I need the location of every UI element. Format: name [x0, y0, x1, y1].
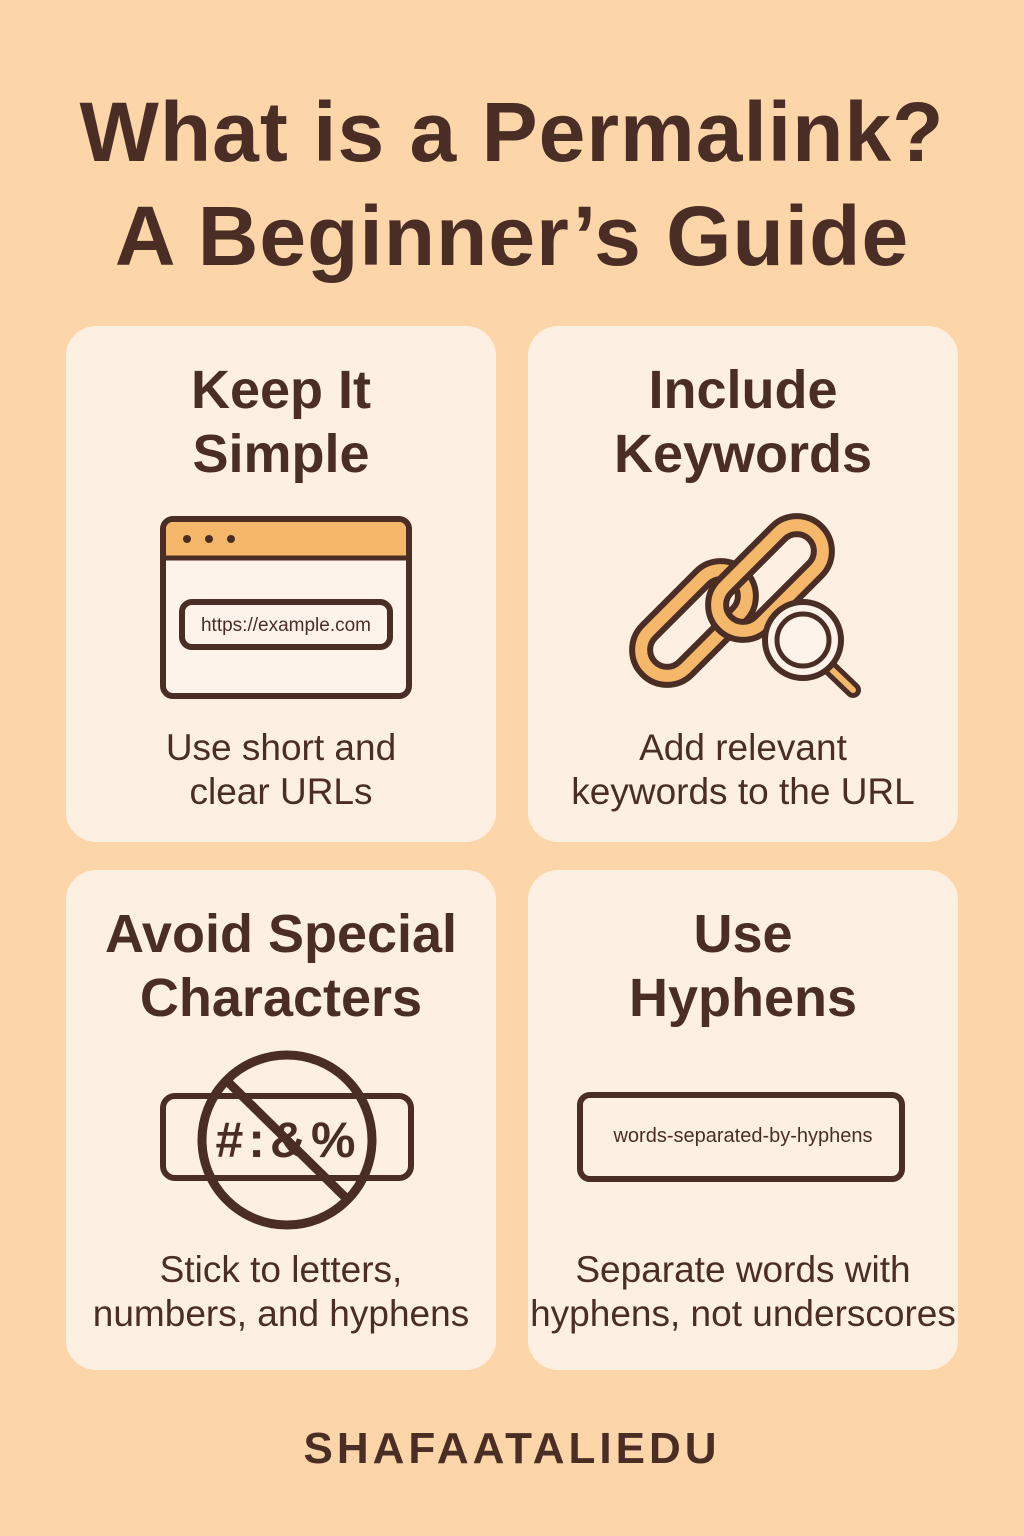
heading: Use — [693, 904, 793, 964]
heading — [191, 360, 371, 484]
description: Use short and — [166, 727, 396, 768]
heading: Keywords — [614, 424, 872, 484]
icon: prohibited characters: #:&% — [215, 1112, 361, 1168]
heading: Avoid Special — [105, 904, 457, 964]
description: Stick to letters, — [160, 1249, 402, 1290]
title — [80, 85, 944, 283]
heading — [105, 904, 457, 1028]
description — [530, 1249, 956, 1334]
icon: hyphenated url box — [577, 1092, 905, 1182]
panel: use hyphens — [528, 870, 958, 1370]
panel: include keywords — [528, 326, 958, 842]
heading: Keep It — [191, 360, 371, 420]
icon: hyphenated url box: words-separated-by-hyphens — [612, 1125, 873, 1147]
title: A Beginner’s Guide — [115, 189, 909, 283]
heading: Simple — [192, 424, 370, 484]
description: Separate words with — [575, 1249, 911, 1290]
description: keywords to the URL — [571, 771, 915, 812]
heading — [614, 360, 872, 484]
icon: browser window — [160, 516, 412, 699]
heading: Include — [648, 360, 838, 420]
description — [93, 1249, 469, 1334]
description: clear URLs — [190, 771, 372, 812]
description — [571, 727, 915, 812]
icon: browser window: https://example.com — [201, 615, 371, 636]
panel: avoid special characters — [66, 870, 496, 1370]
footer brand: SHAFAATALIEDU — [303, 1424, 721, 1473]
description — [166, 727, 396, 812]
description: Add relevant — [639, 727, 847, 768]
icon: chain link with magnifier — [629, 513, 861, 698]
heading — [629, 904, 857, 1028]
heading: Characters — [140, 968, 422, 1028]
description: numbers, and hyphens — [93, 1293, 469, 1334]
title: What is a Permalink? — [80, 85, 944, 179]
description: hyphens, not underscores — [530, 1293, 956, 1334]
panel: keep it simple — [66, 326, 496, 842]
heading: Hyphens — [629, 968, 857, 1028]
icon: prohibited characters — [160, 1050, 414, 1230]
